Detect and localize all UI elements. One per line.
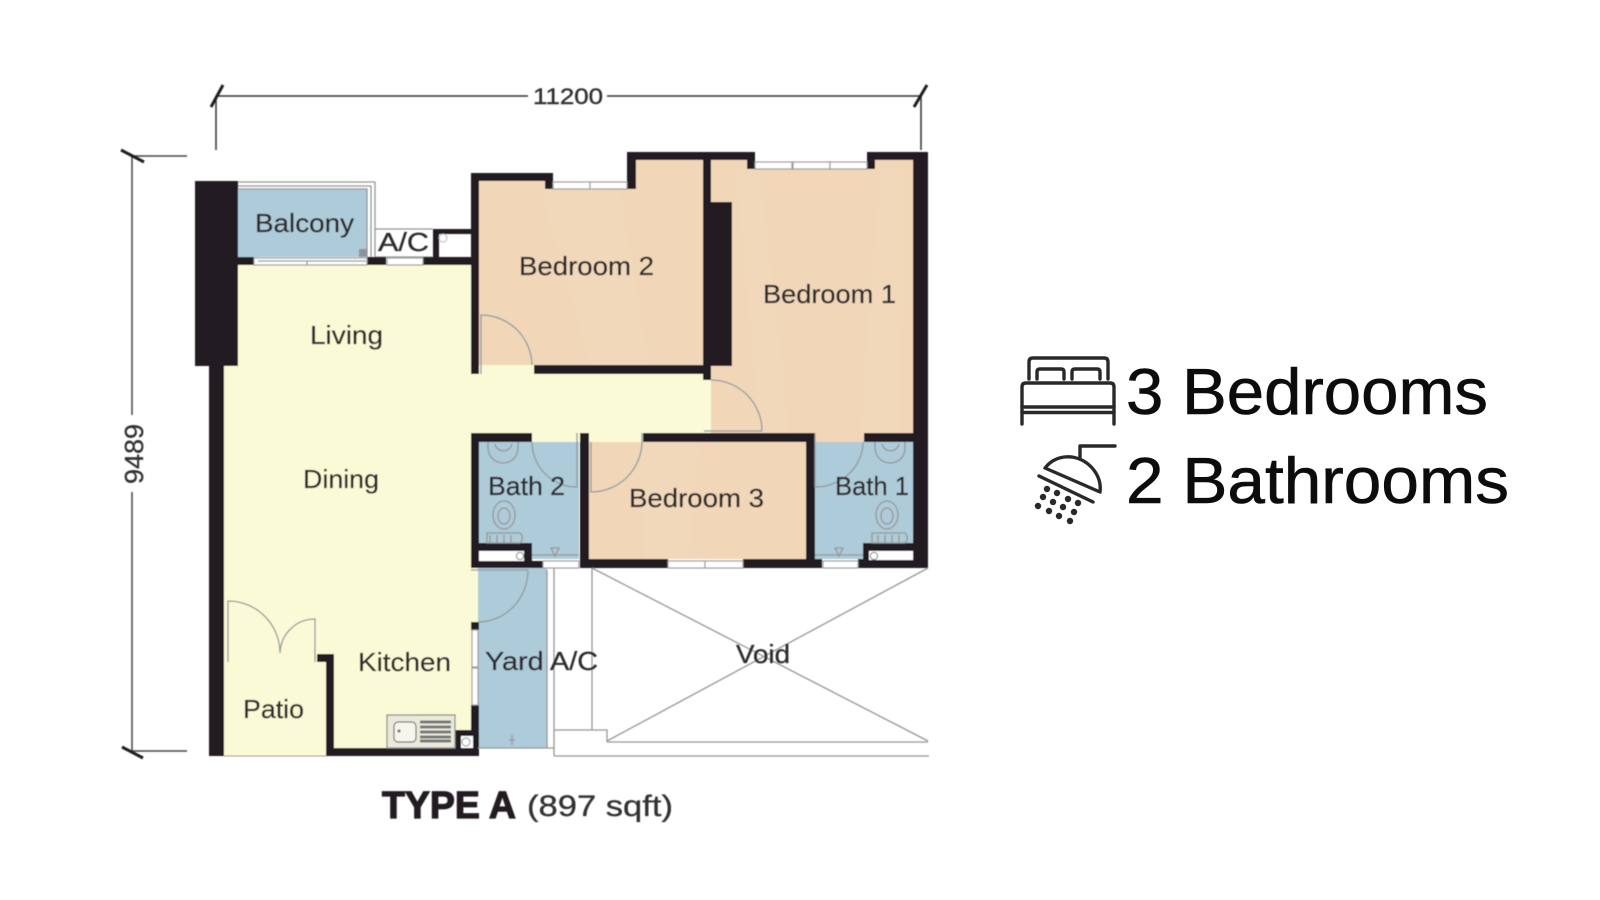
room label: bedroom 3: Bedroom 3 [629, 483, 764, 513]
closets and shafts [439, 234, 913, 748]
room label: bedroom 1: Bedroom 1 [763, 279, 896, 309]
room fill: bath 1 [815, 442, 913, 559]
room fill: door threshold strip [479, 365, 703, 442]
text: bedroom count: 3 Bedrooms [1126, 355, 1488, 428]
plan caption: TYPE A [382, 785, 516, 827]
room fill: bedroom 3 [588, 442, 806, 559]
room label: patio: Patio [243, 694, 304, 724]
room fill: bedroom 1 [711, 160, 913, 442]
door swings [228, 315, 863, 662]
room label: kitchen: Kitchen [358, 647, 451, 677]
plan caption [382, 785, 673, 827]
room label: yard A/C: Yard A/C [485, 646, 598, 676]
dimension: height 9489: 9489 [119, 424, 149, 484]
structural walls [195, 152, 928, 756]
text: bathroom count: 2 Bathrooms [1126, 444, 1509, 517]
plan caption: (897 sqft) [527, 790, 673, 823]
icon: bed [1022, 358, 1114, 424]
void outline [224, 568, 929, 756]
floor plan [195, 152, 929, 756]
room fill: living, dining, kitchen and patio [224, 265, 711, 756]
room label: living: Living [310, 320, 383, 350]
kitchen sink [387, 715, 455, 748]
room label: bath 2: Bath 2 [488, 471, 565, 501]
room fill: bedroom 2 [479, 160, 703, 365]
drain marker [509, 735, 515, 745]
room label: dining: Dining [303, 464, 379, 494]
A/C ledge [375, 229, 433, 257]
room label: A/C: A/C [378, 227, 429, 257]
room tone bands [540, 170, 905, 559]
room label: bath 1: Bath 1 [835, 471, 909, 501]
dimension: width 11200: 11200 [533, 84, 603, 109]
fixtures: bath 1 [815, 442, 907, 556]
dimension: height 9489 [119, 150, 187, 758]
icon: shower [1035, 446, 1115, 524]
room label: void: Void [736, 639, 790, 669]
room label: bedroom 2: Bedroom 2 [519, 251, 654, 281]
room fill: bath 2 [479, 442, 579, 559]
room label: balcony: Balcony [255, 208, 354, 238]
balcony railing [238, 182, 375, 257]
fixtures: bath 2 [487, 442, 579, 556]
dimension: width 11200 [211, 84, 927, 150]
room fill: yard [478, 568, 547, 748]
windows [254, 162, 867, 705]
room fill: balcony [238, 189, 367, 257]
